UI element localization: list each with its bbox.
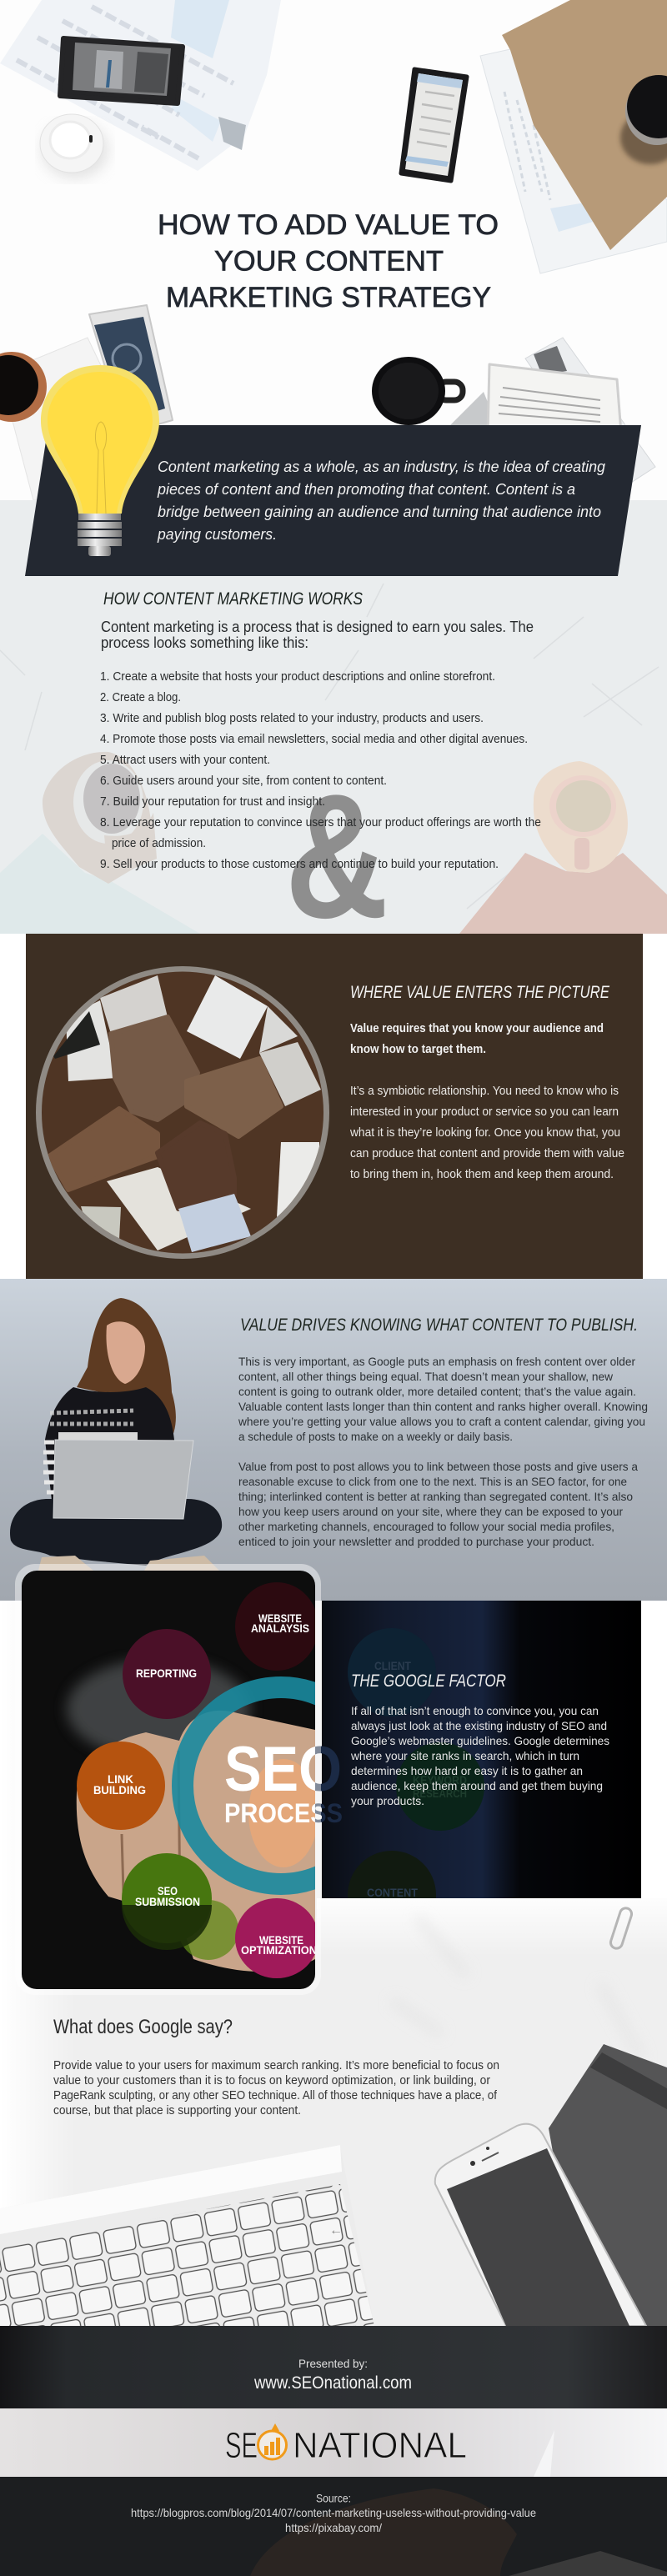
intro text: pieces of content and then promoting that content. Content is a: [157, 481, 575, 498]
photo: white phone: [435, 2124, 646, 2326]
text: source label: Source:: [316, 2491, 351, 2504]
photo: white stripe: [58, 1432, 138, 1441]
photo: silver phone: [89, 305, 173, 434]
text: source url two: https://pixabay.com/: [285, 2521, 382, 2534]
photo: paper in shadow: [509, 2551, 667, 2576]
circle: seo submission: SUBMISSION: [135, 1895, 200, 1908]
circle: reporting: REPORTING: [136, 1666, 197, 1680]
circle: small green: [178, 1900, 238, 1960]
photo: sweater pattern: [50, 1411, 133, 1424]
text: value paragraph one: content is going to outrank older, more detailed content; that’s the value again.: [238, 1385, 636, 1398]
list: process steps: 5. Attract users with your content.: [100, 753, 270, 767]
label: seo process: PROCESS: [224, 1798, 343, 1828]
photo: woman with laptop: [10, 1298, 222, 1571]
ghost circle: keyword research: RESEARCH: [413, 1787, 467, 1800]
text: google factor: If all of that isn’t enough to convince you, you can: [351, 1704, 599, 1717]
heading: where value: WHERE VALUE ENTERS THE PICTURE: [350, 983, 610, 1002]
photo: left sleeve: [0, 834, 200, 934]
text: content marketing lead: Content marketing is a process that is designed to earn you sales. The: [101, 619, 534, 635]
text: value requires: [350, 1021, 604, 1056]
photo: papers top left: [0, 0, 281, 171]
ghost letters: [224, 1734, 343, 1828]
photo: right sleeve: [459, 853, 667, 934]
circle: seo submission: [122, 1853, 212, 1950]
circle: website analysis: ANALAYSIS: [251, 1621, 309, 1635]
list: process steps: 9. Sell your products to those customers and continue to build your reputation.: [100, 857, 499, 871]
photo: phone top centre: [401, 69, 467, 181]
circle: link building: [77, 1742, 165, 1830]
label: seo process: SEO: [224, 1734, 342, 1805]
text: value paragraph two: thing; interlinked content is better at ranking than segregated content. It’s also: [238, 1490, 633, 1503]
text: google say paragraph: PageRank sculpting, or any other SEO technique. All of those techniques have a place, of: [53, 2088, 498, 2102]
photo: shoes: [38, 1556, 219, 1571]
ghost letters: PROCESS: [224, 1798, 343, 1828]
list: process steps: [100, 669, 541, 871]
circle: website optimization: OPTIMIZATION: [241, 1943, 317, 1957]
circle: seo submission: SEO: [158, 1884, 178, 1897]
text: symbiotic relationship: can produce that content and provide them with value: [350, 1146, 624, 1160]
text: google factor: [350, 1704, 609, 1807]
list: process steps: 2. Create a blog.: [100, 690, 181, 704]
circle: link building: LINK: [108, 1772, 133, 1786]
title: MARKETING STRATEGY: [166, 282, 491, 313]
text: google factor: Google’s webmaster guidelines. Google determines: [351, 1734, 609, 1747]
text: google factor: always just look at the existing industry of SEO and: [351, 1719, 607, 1732]
circle: website analysis: [235, 1582, 318, 1671]
panel: marble background with hands: [0, 500, 667, 955]
ghost circle: keyword research: KEYWORD: [413, 1773, 467, 1787]
label: seo process: [225, 1746, 315, 1822]
list: process steps: 6. Guide users around your site, from content to content.: [100, 774, 387, 788]
icon: paperclip: [609, 1907, 633, 1950]
title: [158, 209, 499, 313]
photo: coffee lid: [40, 114, 108, 178]
text: symbiotic relationship: It’s a symbiotic relationship. You need to know who is: [350, 1084, 619, 1098]
text: presented by: Presented by:: [298, 2357, 368, 2370]
photo: seo process fist: [22, 1571, 315, 1989]
icon: light bulb: [41, 365, 159, 556]
circle: link building: BUILDING: [93, 1783, 146, 1797]
photo: soft grey glow: [67, 1659, 250, 1759]
photo: black mug: [372, 357, 463, 425]
text: source url one: https://blogpros.com/blog/2014/07/content-marketing-useless-without-providing-value: [131, 2506, 536, 2519]
text: google say paragraph: Provide value to your users for maximum search ranking. It’s more beneficial to focus on: [53, 2058, 499, 2072]
text: symbiotic relationship: interested in your product or service so you can learn: [350, 1105, 619, 1119]
text: google factor: audience, keep them around and get them buying: [351, 1779, 603, 1792]
list: process steps: 3. Write and publish blog posts related to your industry, products and users.: [100, 711, 484, 725]
ghost letters: SEO: [224, 1734, 342, 1805]
panel: google factor: [315, 1601, 641, 1898]
list: process steps: 7. Build your reputation for trust and insight.: [100, 794, 325, 809]
text: value paragraph two: Value from post to post allows you to link between those posts and give users a: [238, 1460, 638, 1473]
text: value paragraph one: where you’re getting your value allows you to craft a content calendar, giving you: [238, 1415, 645, 1428]
text: symbiotic relationship: [349, 1084, 624, 1181]
ghost circle: content: CONTENT: [367, 1886, 418, 1899]
photo: dark notebook: [549, 2044, 667, 2326]
intro text: paying customers.: [157, 526, 277, 543]
text: symbiotic relationship: what it is they’re looking for. Once you know that, you: [349, 1125, 620, 1140]
title: HOW TO ADD VALUE TO: [158, 209, 499, 241]
photo: notepad lower left: [12, 337, 102, 500]
ghost circle: client: CLIENT: [374, 1659, 411, 1672]
text: content marketing lead: process looks something like this:: [101, 634, 308, 651]
photo: documents lower right: [442, 338, 655, 492]
photo: crossed legs: [10, 1499, 222, 1566]
photo: hand in shadow: [250, 2488, 517, 2576]
list: process steps: price of admission.: [112, 836, 206, 850]
photo: hair: [77, 1298, 176, 1446]
photo: striped sleeve: [43, 1442, 54, 1492]
photo: kraft folder: [502, 0, 667, 250]
photo: black cup top right: [620, 75, 667, 164]
dark intro panel: [25, 425, 641, 576]
text: google say paragraph: course, but that place is supporting your content.: [53, 2103, 301, 2117]
text: value paragraph two: enticed to join your newsletter and prodded to purchase your product.: [238, 1535, 594, 1548]
photo: ampersand: &: [285, 757, 389, 955]
text: value paragraph one: [238, 1355, 648, 1443]
circle: reporting: [123, 1629, 211, 1719]
ghost circle: keyword research: [396, 1742, 484, 1831]
text: google say paragraph: [53, 2058, 499, 2117]
text: value paragraph two: reasonable excuse to click from one to the next. This is an SEO factor, for one: [238, 1475, 627, 1488]
photo: dark tablet: [60, 38, 183, 103]
list: process steps: 8. Leverage your reputation to convince users that your product offerings are worth the: [100, 815, 541, 829]
text: google factor: your products.: [351, 1794, 424, 1807]
title: YOUR CONTENT: [214, 245, 444, 277]
key legend: arrow: ←: [329, 2223, 343, 2238]
panel: presented by: [0, 2326, 667, 2408]
photo: fist: [77, 1711, 315, 1972]
panel: where value enters the picture: [26, 934, 643, 1279]
photo: fists circle: [33, 959, 334, 1267]
photo frame: [15, 1564, 321, 1995]
photo: thumb: [248, 1759, 318, 1867]
ghost circle: content: [348, 1851, 436, 1898]
photo: papers under folder: [480, 46, 667, 273]
logo: seo national: SE: [225, 2425, 258, 2466]
list: process steps: 1. Create a website that hosts your product descriptions and online storefront.: [100, 669, 495, 684]
text: value requires: Value requires that you know your audience and: [350, 1021, 604, 1035]
text: value paragraph two: [238, 1460, 638, 1548]
panel: source: [0, 2477, 667, 2576]
photo: keyboard: [0, 2145, 374, 2326]
circle: website optimization: WEBSITE: [259, 1933, 303, 1947]
text: google factor: determines how hard or easy it is to gather an: [351, 1764, 583, 1777]
heading: how content marketing works: HOW CONTENT MARKETING WORKS: [103, 589, 363, 609]
ghost circle: client: [348, 1628, 436, 1716]
text: google say paragraph: value to your customers than it is to focus on keyword optimization, or link building, or: [53, 2073, 490, 2087]
circle: website analysis: WEBSITE: [258, 1611, 302, 1625]
intro text: [157, 459, 605, 543]
text: value paragraph one: a schedule of posts to make on a weekly or daily basis.: [238, 1430, 513, 1443]
panel: header desk photo: [0, 0, 667, 500]
text: value paragraph one: content, all other things being equal. That doesn’t mean your shallow, new: [238, 1370, 614, 1383]
photo: teal ring: [172, 1676, 315, 1895]
text: value paragraph one: This is very important, as Google puts an emphasis on fresh content over older: [238, 1355, 635, 1368]
logo: seo national: [225, 2423, 467, 2466]
photo: face: [106, 1321, 145, 1384]
photo: finger shadows: [120, 1751, 181, 1892]
intro text: Content marketing as a whole, as an industry, is the idea of creating: [158, 459, 605, 475]
text: content marketing lead: [101, 619, 534, 651]
text: value paragraph two: how you keep users around on your site, where they can be exposed to your: [238, 1505, 623, 1518]
text: value paragraph one: Valuable content lasts longer than thin content and ranks higher overall. Knowing: [238, 1400, 648, 1413]
heading: the google factor: THE GOOGLE FACTOR: [351, 1671, 506, 1691]
text: symbiotic relationship: to bring them in, hook them and keep them around.: [350, 1167, 614, 1181]
photo: right hands and cup: [534, 761, 628, 873]
photo: laptop: [53, 1440, 193, 1519]
photo: coffee cup lower left: [0, 352, 47, 422]
panel: marble desk background: [0, 1601, 667, 2326]
text: google factor: where your site ranks in search, which in turn: [350, 1749, 579, 1762]
text: value requires: know how to target them.: [350, 1042, 486, 1056]
heading: what does google say: What does Google say?: [53, 2016, 233, 2038]
intro text: bridge between gaining an audience and turning that audience into: [158, 504, 601, 520]
panel: logo band: [0, 2408, 667, 2477]
text: website: www.SEOnational.com: [253, 2373, 412, 2393]
list: process steps: 4. Promote those posts via email newsletters, social media and other digital avenues.: [100, 732, 528, 746]
panel: value drives content: [0, 1279, 667, 1601]
photo: sweater: [45, 1387, 183, 1501]
circle: website optimization: [235, 1898, 318, 1978]
text: value paragraph two: other marketing channels, encouraged to follow your social media profiles,: [238, 1520, 614, 1533]
logo: seo national: NATIONAL: [293, 2425, 467, 2466]
photo: left hands and cup: [43, 752, 157, 884]
